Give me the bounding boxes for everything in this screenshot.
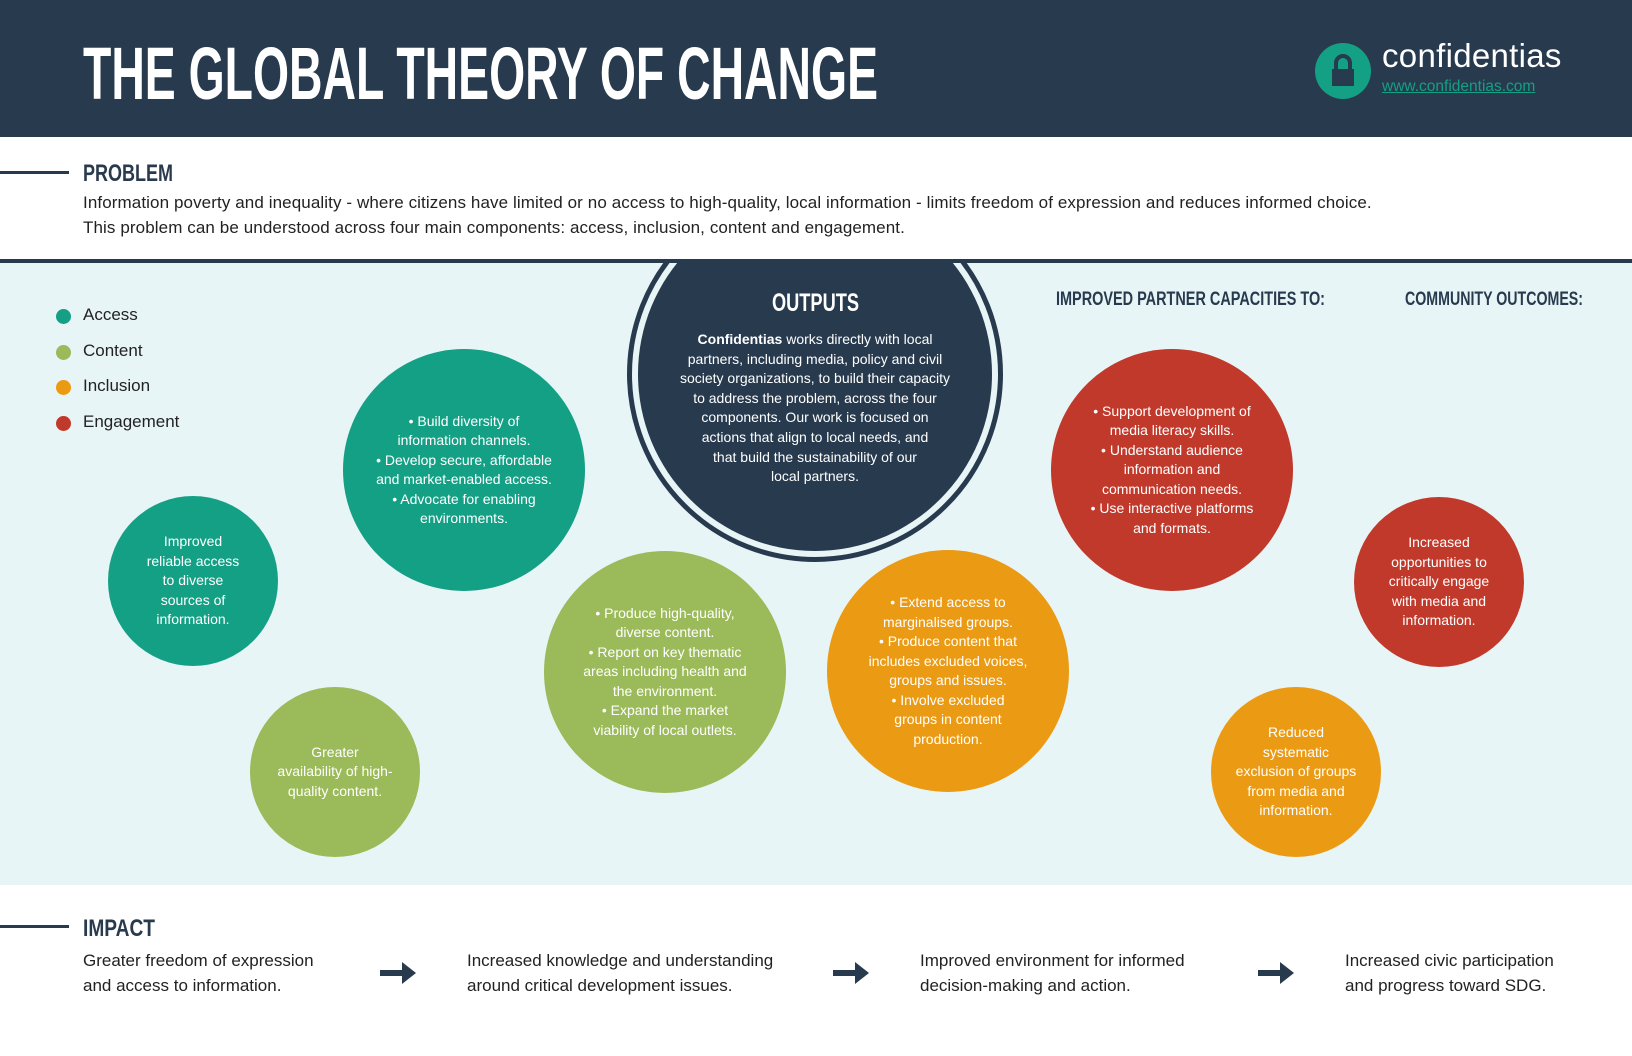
impact text 4: and progress toward SDG.	[1345, 976, 1546, 995]
impact text 3: decision-making and action.	[920, 976, 1131, 995]
legend: Inclusion	[83, 376, 150, 395]
legend: Content	[83, 341, 143, 360]
outputs circle: Confidentias works directly with local	[698, 331, 932, 347]
circle: engagement outputs: information and	[1124, 461, 1220, 477]
circle: content outputs: viability of local outlets.	[593, 722, 737, 738]
circle: engagement outcome: information.	[1402, 612, 1476, 628]
outputs circle: OUTPUTS	[772, 289, 859, 317]
circle: content outputs	[544, 551, 786, 793]
circle: content outputs: areas including health and	[583, 663, 747, 679]
circle: inclusion outputs: groups in content	[894, 711, 1002, 727]
impact text 3	[920, 951, 1185, 995]
circle: engagement outcome: with media and	[1392, 593, 1486, 609]
circle: content outcome: Greater	[311, 744, 359, 760]
circle: inclusion outcome: systematic	[1263, 744, 1329, 760]
problem section	[0, 160, 1372, 237]
circle: engagement outcome: Increased	[1408, 534, 1470, 550]
circle: access outcome: to diverse	[163, 572, 223, 588]
circle: content outputs: • Report on key thematic	[589, 644, 741, 660]
circle: access outcome: sources of	[161, 592, 225, 608]
legend	[56, 305, 180, 431]
impact text 1: Greater freedom of expression	[83, 951, 314, 970]
circle: engagement outcome: opportunities to	[1391, 554, 1487, 570]
icon: lock	[1315, 43, 1371, 99]
circle: inclusion outputs: • Involve excluded	[891, 692, 1005, 708]
impact text 3: Improved environment for informed	[920, 951, 1185, 970]
outputs circle: to address the problem, across the four	[693, 390, 937, 406]
circle: inclusion outputs: includes excluded voices,	[869, 652, 1027, 668]
impact text 1	[83, 951, 314, 995]
impact text 4: Increased civic participation	[1345, 951, 1554, 970]
circle: content outputs: diverse content.	[616, 624, 714, 640]
logo	[1315, 37, 1562, 99]
circle: content outcome	[250, 687, 420, 857]
circle: content outcome: availability of high-	[277, 763, 393, 779]
heading: problem: PROBLEM	[83, 160, 173, 187]
circle: engagement outputs: • Support development of	[1093, 403, 1251, 419]
circle: access outputs: environments.	[420, 510, 508, 526]
circle: inclusion outcome: Reduced	[1268, 724, 1324, 740]
circle: access outcome: Improved	[164, 533, 222, 549]
circle: access outputs: information channels.	[397, 432, 531, 448]
outputs circle: actions that align to local needs, and	[702, 429, 928, 445]
circle: inclusion outputs	[827, 550, 1069, 792]
circle: inclusion outcome: from media and	[1247, 783, 1345, 799]
circle: access outcome: reliable access	[147, 553, 239, 569]
arrow 1	[380, 962, 416, 984]
headings: partner capacities and community outcomes	[1056, 289, 1583, 310]
circle: engagement outcome	[1354, 497, 1524, 667]
middle band	[0, 259, 1632, 885]
problem text: Information poverty and inequality - where citizens have limited or no access to high-quality, local information - limits freedom of expression and reduces informed choice.	[83, 193, 1372, 212]
circle: engagement outputs: media literacy skills.	[1110, 422, 1234, 438]
circle: content outputs: • Expand the market	[602, 702, 728, 718]
circle: engagement outputs: • Use interactive platforms	[1091, 500, 1253, 516]
problem text: This problem can be understood across four main components: access, inclusion, content and engagement.	[83, 218, 905, 237]
circle: content outputs: the environment.	[613, 683, 717, 699]
outputs circle: that build the sustainability of our	[713, 449, 917, 465]
circle: access outputs: • Build diversity of	[409, 412, 519, 428]
circle: inclusion outcome: exclusion of groups	[1236, 763, 1356, 779]
legend: Access	[83, 305, 138, 324]
problem text	[83, 193, 1372, 237]
logo: confidentias	[1382, 37, 1562, 74]
circle: engagement outcome: critically engage	[1389, 573, 1489, 589]
circle: access outputs	[343, 349, 585, 591]
circle: inclusion outputs: production.	[913, 730, 983, 746]
circle: engagement outputs: • Understand audience	[1101, 442, 1243, 458]
impact text 2: around critical development issues.	[467, 976, 733, 995]
circle: engagement outputs: and formats.	[1133, 520, 1211, 536]
circle: inclusion outcome: information.	[1259, 802, 1333, 818]
outputs circle	[627, 186, 1003, 562]
impact section	[0, 915, 1554, 995]
outputs circle: local partners.	[771, 468, 859, 484]
circle: inclusion outputs: • Produce content that	[879, 633, 1017, 649]
circle: inclusion outputs: marginalised groups.	[883, 614, 1013, 630]
headings: partner capacities and community outcomes: IMPROVED PARTNER CAPACITIES TO:	[1056, 289, 1325, 310]
header band	[0, 0, 1632, 137]
circle: inclusion outcome	[1211, 687, 1381, 857]
outputs circle: society organizations, to build their capacity	[680, 370, 950, 386]
circle: inclusion outputs: groups and issues.	[889, 672, 1007, 688]
circle: inclusion outputs: • Extend access to	[890, 594, 1006, 610]
impact text 1: and access to information.	[83, 976, 281, 995]
circle: engagement outputs: communication needs.	[1102, 481, 1242, 497]
outputs circle: partners, including media, policy and civil	[688, 351, 942, 367]
impact text 2: Increased knowledge and understanding	[467, 951, 773, 970]
arrow 3	[1258, 962, 1294, 984]
legend: Engagement	[83, 412, 179, 431]
circle: access outputs: and market-enabled access.	[376, 471, 552, 487]
circle: engagement outputs	[1051, 349, 1293, 591]
circle: access outputs: • Develop secure, affordable	[376, 452, 552, 468]
circle: access outcome	[108, 496, 278, 666]
circle: content outcome: quality content.	[288, 783, 382, 799]
circle: access outcome: information.	[156, 611, 230, 627]
circle: access outputs: • Advocate for enabling	[392, 490, 536, 506]
outputs circle: components. Our work is focused on	[701, 409, 929, 425]
logo: www.confidentias.com	[1382, 78, 1535, 95]
impact text 4	[1345, 951, 1554, 995]
impact text 2	[467, 951, 773, 995]
circle: content outputs: • Produce high-quality,	[595, 605, 735, 621]
arrow 2	[833, 962, 869, 984]
